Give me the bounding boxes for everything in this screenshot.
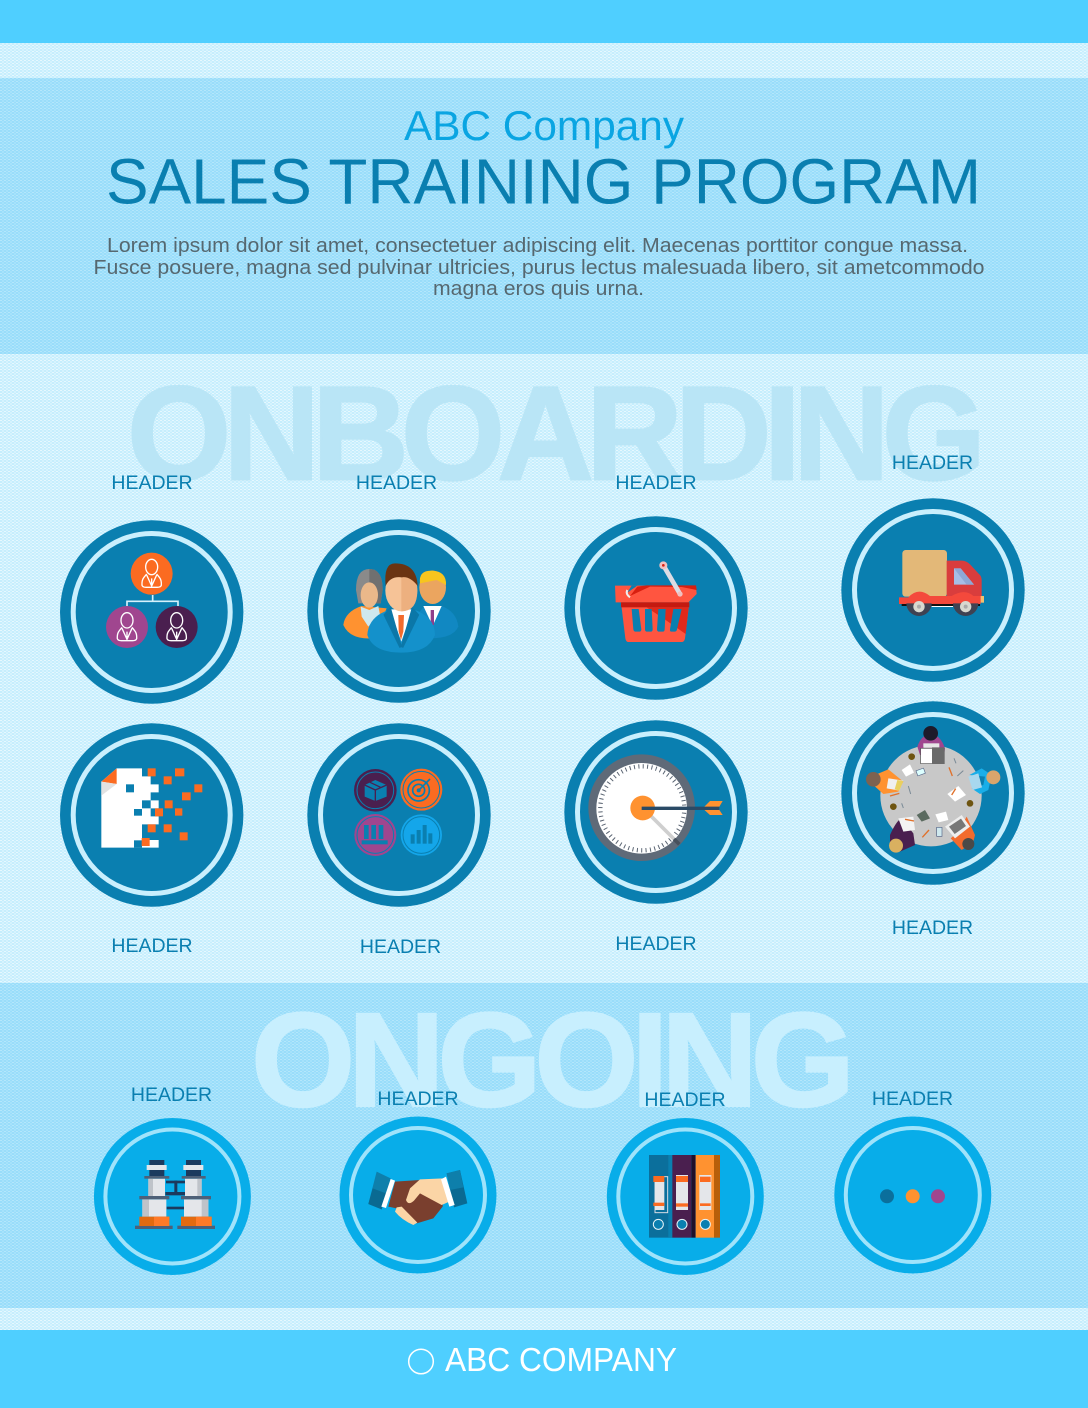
icon: meeting table seen from above (841, 701, 1025, 885)
icon: four badges (307, 723, 491, 907)
headers: HEADER (356, 472, 437, 494)
icon: team of people (307, 519, 491, 703)
headers: HEADER (615, 933, 697, 955)
headers: HEADER (615, 472, 697, 494)
headers (111, 452, 973, 1111)
headers: HEADER (644, 1089, 726, 1111)
icon: handshake (340, 1116, 496, 1274)
main title: SALES TRAINING PROGRAM (106, 146, 981, 218)
headers: HEADER (892, 452, 973, 474)
section word: onboarding: ONBOARDING (127, 360, 986, 508)
footer logo and company name: ABC COMPANY (445, 1341, 677, 1378)
headers: HEADER (892, 917, 973, 939)
icon: binders (607, 1118, 764, 1275)
section word: ongoing: ONGOING (251, 986, 855, 1135)
icon: three dots (834, 1116, 991, 1274)
intro paragraph (94, 235, 984, 300)
icon: binoculars (94, 1118, 251, 1275)
headers: HEADER (111, 472, 193, 494)
headers: HEADER (872, 1088, 953, 1110)
icon: dissolving document (60, 723, 243, 907)
company name: ABC Company (404, 102, 684, 149)
headers: HEADER (111, 935, 193, 957)
intro paragraph: Lorem ipsum dolor sit amet, consectetuer adipiscing elit. Maecenas porttitor congue massa. (107, 235, 968, 257)
icon: shopping basket (564, 516, 748, 700)
intro paragraph: magna eros quis urna. (433, 278, 644, 300)
icon: delivery truck (841, 498, 1025, 682)
headers: HEADER (360, 936, 441, 958)
icon: org chart (60, 520, 243, 704)
icon: dial with arrow (564, 720, 748, 904)
headers: HEADER (377, 1088, 459, 1110)
intro paragraph: Fusce posuere, magna sed pulvinar ultricies, purus lectus malesuada libero, sit ametcommodo (94, 257, 984, 279)
headers: HEADER (131, 1084, 212, 1106)
